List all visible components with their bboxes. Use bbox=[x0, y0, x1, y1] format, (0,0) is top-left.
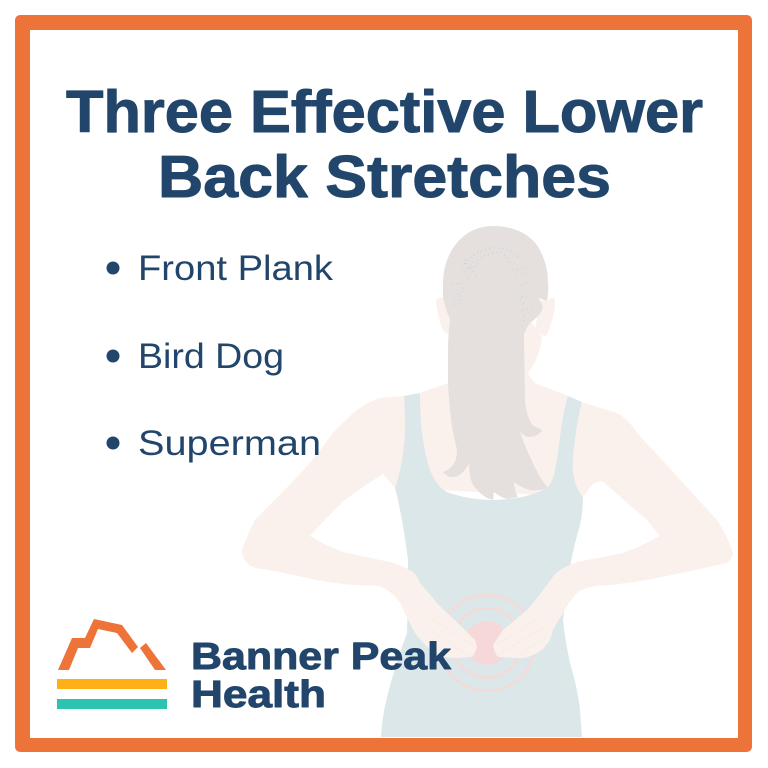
torso skin bbox=[395, 320, 583, 497]
logo wordmark: Health bbox=[191, 674, 326, 716]
title: Back Stretches bbox=[158, 144, 611, 210]
item: Bird Dog: Bird Dog bbox=[138, 337, 284, 376]
bullet list bbox=[106, 249, 334, 463]
icon: mountain bbox=[58, 619, 166, 670]
finger lines bbox=[427, 617, 547, 658]
logo wordmark bbox=[191, 636, 452, 716]
illustration: woman holding lower back bbox=[242, 226, 733, 737]
title: Three Effective Lower bbox=[66, 79, 703, 145]
title bbox=[66, 79, 703, 210]
hair and ponytail bbox=[443, 226, 548, 500]
right arm and hand bbox=[493, 402, 733, 658]
ears bbox=[436, 298, 555, 337]
icon: yellow band bbox=[57, 679, 167, 689]
pain indicator rings bbox=[439, 595, 535, 691]
logo bbox=[57, 619, 452, 716]
logo wordmark: Banner Peak bbox=[191, 636, 452, 678]
left arm and hand bbox=[242, 396, 477, 658]
tank top bbox=[381, 393, 583, 737]
item: Front Plank: Front Plank bbox=[138, 249, 334, 288]
hair texture dots bbox=[453, 248, 532, 323]
item: Superman: Superman bbox=[138, 424, 321, 463]
icon: teal band bbox=[57, 699, 167, 709]
